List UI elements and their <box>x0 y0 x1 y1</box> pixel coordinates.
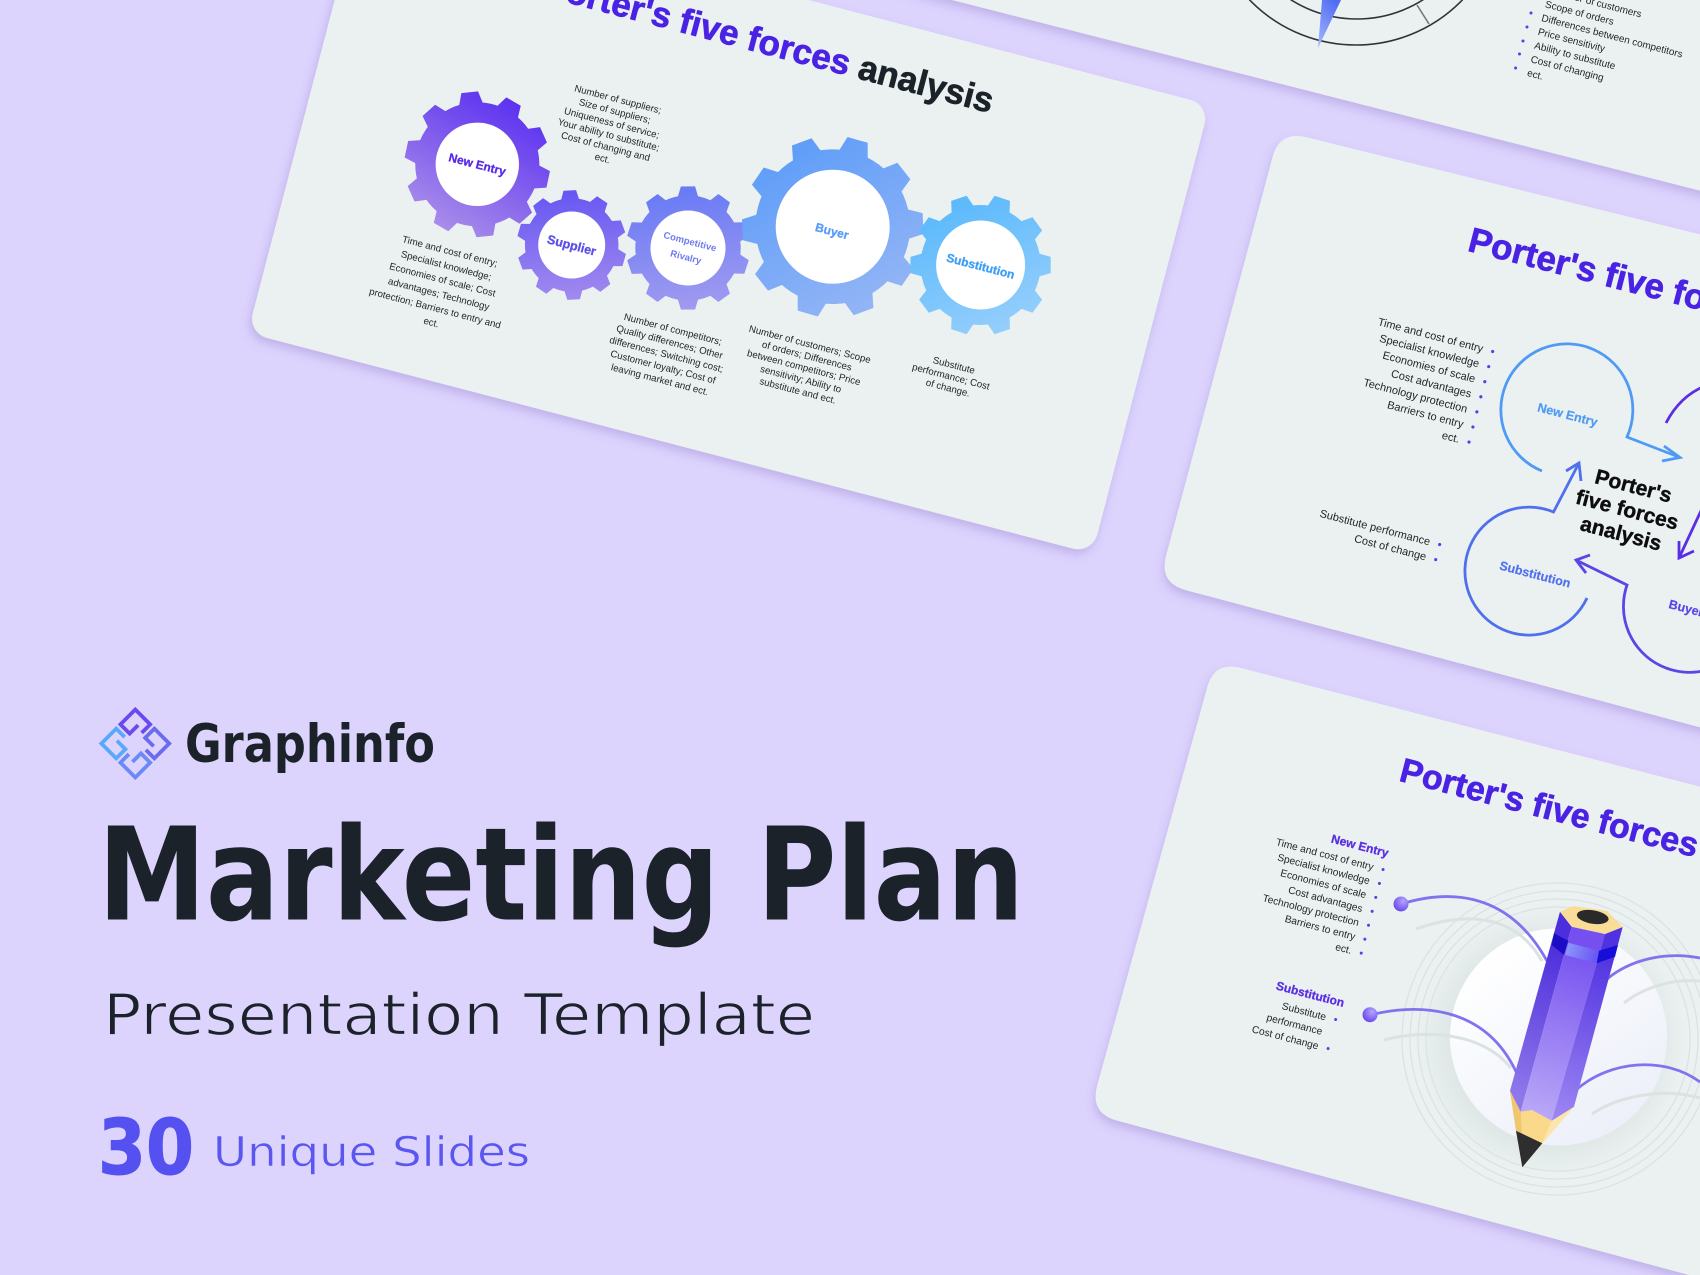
text: substitution factors: of change. <box>925 378 971 400</box>
list: New Entry <box>1253 818 1391 960</box>
text: competitive rivalry factors: differences; Switching cost; <box>608 335 724 375</box>
list: New Entry: Barriers to entry <box>1283 914 1357 943</box>
gear: Competitive Rivalry: Rivalry <box>669 248 703 267</box>
text: new entry factors: Time and cost of entry; <box>401 234 499 270</box>
pencil target rings <box>1402 883 1700 1195</box>
text: supplier factors: Cost of changing and <box>560 130 651 164</box>
gear: Buyer <box>739 134 926 319</box>
bullet list: buyer factors: Price sensitivity <box>1537 27 1606 55</box>
text: supplier factors <box>550 81 670 178</box>
list: new entry factors: Technology protection <box>1362 377 1469 416</box>
gear: Competitive Rivalry: Competitive <box>662 230 717 254</box>
list: Substitution: Cost of change <box>1250 1024 1320 1052</box>
list: substitution factors: Cost of change <box>1353 533 1427 563</box>
list: new entry factors: Economies of scale <box>1381 350 1477 385</box>
connector lines <box>1370 897 1700 1090</box>
text: competitive rivalry factors: Quality differences; Other <box>615 323 725 362</box>
number 30: 30 <box>98 1104 194 1193</box>
list: new entry factors: Specialist knowledge <box>1378 333 1480 370</box>
slide card background <box>1096 667 1700 1275</box>
bullet list: buyer factors: Differences between competitors <box>1540 13 1684 61</box>
subtitle: Presentation Template <box>103 982 815 1048</box>
list: Substitution: performance <box>1265 1013 1324 1038</box>
text: substitution factors <box>908 351 994 404</box>
radial chart arcs <box>1208 0 1504 45</box>
list: Substitution: Substitute <box>1281 1001 1327 1023</box>
bullet list: buyer factors: ect. <box>1526 68 1544 83</box>
text: competitive rivalry factors <box>602 310 731 400</box>
list: New Entry: Technology protection <box>1261 893 1360 929</box>
list: new entry factors <box>1353 316 1496 449</box>
text: buyer factors: of orders; Differences <box>761 340 853 374</box>
bullet list: buyer factors: Scope of orders <box>1544 0 1615 28</box>
center label: five forces <box>1573 486 1681 535</box>
text: substitution factors: performance; Cost <box>911 362 991 393</box>
text: new entry factors: ect. <box>422 316 440 330</box>
text: new entry factors: Economies of scale; Cost <box>388 261 497 300</box>
list: new entry factors: Barriers to entry <box>1386 399 1465 431</box>
center label: analysis <box>1578 512 1664 556</box>
list: New Entry: Time and cost of entry <box>1275 837 1375 874</box>
list: new entry factors: Cost advantages <box>1390 368 1473 401</box>
text: new entry factors: protection; Barriers to entry and <box>368 286 502 331</box>
list: New Entry: Specialist knowledge <box>1276 853 1371 887</box>
gear: Substitution <box>910 196 1051 334</box>
arrow circle: New Entry <box>1501 344 1680 471</box>
list: Substitution <box>1250 975 1346 1056</box>
text: new entry factors <box>364 229 517 346</box>
text: new entry factors: Specialist knowledge; <box>400 249 492 283</box>
list: New Entry: Economies of scale <box>1279 868 1368 901</box>
label: Unique Slides: Unique Slides <box>213 1128 530 1176</box>
list: new entry factors: ect. <box>1441 430 1461 446</box>
text: buyer factors: substitute and ect. <box>758 376 837 407</box>
panel: top-right slide <box>661 0 1700 296</box>
arrow circle: Buyer <box>1576 555 1700 672</box>
arrow circle: Substitution <box>1465 463 1587 635</box>
text: buyer factors: Number of customers; Scope <box>748 324 872 366</box>
text: supplier factors: Number of suppliers; <box>573 83 662 117</box>
gear: Buyer: Buyer <box>814 220 850 242</box>
main title: Marketing Plan <box>98 800 1024 950</box>
text: supplier factors: ect. <box>593 152 611 166</box>
text: competitive rivalry factors: Number of competitors; <box>623 312 723 348</box>
list: New Entry: Cost advantages <box>1287 885 1364 915</box>
center label <box>1567 462 1687 558</box>
logo <box>101 710 435 777</box>
chart needle <box>1318 0 1341 48</box>
panel: gears slide <box>248 0 1210 554</box>
text: new entry factors: advantages; Technology <box>387 276 491 313</box>
list: new entry factors: Time and cost of entry <box>1376 316 1485 355</box>
slide card background <box>661 0 1700 296</box>
center label: Porter's <box>1592 465 1674 508</box>
text: competitive rivalry factors: leaving market and ect. <box>610 362 709 398</box>
halo and white disc <box>1418 908 1686 1176</box>
list: New Entry: New Entry <box>1330 832 1390 860</box>
arrow circle: Supplier <box>1666 386 1700 558</box>
icon: pencil <box>1510 906 1623 1167</box>
bullet list: buyer factors <box>1526 0 1691 116</box>
text: buyer factors <box>736 324 872 413</box>
list: substitution factors: Substitute performance <box>1318 508 1431 548</box>
text: substitution factors: Substitute <box>932 355 976 377</box>
text: supplier factors: Your ability to substitute; <box>556 117 661 154</box>
text: buyer factors: sensitivity; Ability to <box>759 364 842 396</box>
panel: cycle diagram slide <box>1165 136 1700 754</box>
slide count <box>98 1104 530 1193</box>
list: Substitution: Substitution <box>1275 979 1346 1010</box>
text: supplier factors: Uniqueness of service; <box>563 106 660 141</box>
slide card background <box>248 0 1210 554</box>
bullet list: buyer factors: Ability to substitute <box>1533 41 1617 72</box>
text: supplier factors: Size of suppliers; <box>578 97 652 126</box>
gear: Supplier: Supplier <box>546 232 598 259</box>
slide card background <box>1165 136 1700 754</box>
gear: Competitive Rivalry <box>611 171 765 325</box>
logo wordmark: Graphinfo <box>185 714 435 775</box>
list bullets <box>1514 12 1532 70</box>
icon: logo diamond <box>101 710 169 777</box>
label: New Entry: New Entry <box>1536 400 1599 430</box>
connector dots <box>1362 896 1408 1022</box>
text: buyer factors: between competitors; Price <box>746 348 862 388</box>
bullet list: buyer factors: Cost of changing <box>1529 54 1605 84</box>
list: New Entry: ect. <box>1334 942 1353 957</box>
list: substitution factors <box>1314 508 1443 566</box>
gear: Substitution: Substitution <box>945 251 1016 282</box>
gear: New Entry: New Entry <box>447 150 508 179</box>
connector shadows <box>1384 919 1700 1114</box>
gear: Supplier <box>504 178 639 312</box>
text: competitive rivalry factors: Customer loyalty; Cost of <box>609 349 717 387</box>
gear: New Entry <box>392 79 563 249</box>
label: Substitution: Substitution <box>1498 559 1572 591</box>
panel: pencil slide <box>1096 667 1700 1275</box>
